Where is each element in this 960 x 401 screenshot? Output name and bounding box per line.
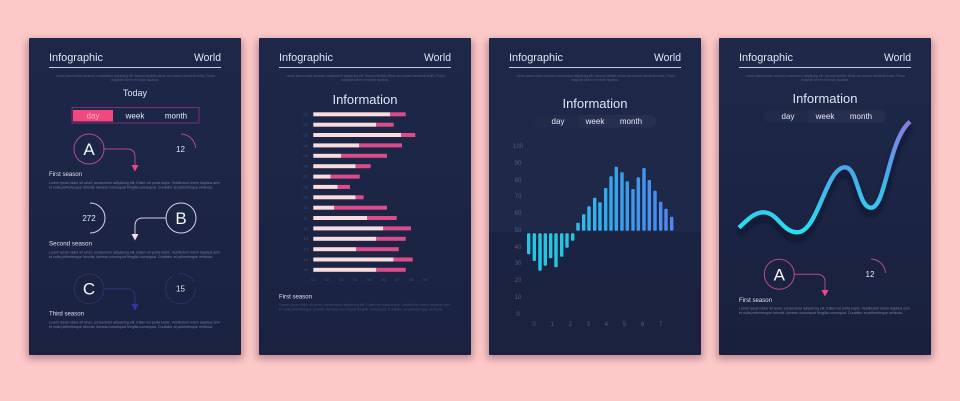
text: first season: Lorem ipsum dolor sit amet, consectetur adipiscing elit. Etiam vel porta turpis. Vestibulum lorem dapibus sem [279, 303, 450, 307]
bar chart: 06 [303, 164, 309, 169]
header: Lorem ipsum dolor sit amet, consectetur adipiscing elit. Aenean facilisis tellus non mauris hendrerit mollis. Fusce [286, 74, 445, 78]
tabs: day week month: week [125, 112, 145, 120]
tabs: day week month: day [782, 112, 794, 121]
heading: today: Today [123, 88, 148, 98]
tabs: day week month: month [165, 112, 187, 120]
tabs: day week month [764, 110, 886, 123]
bar chart: 03 [303, 132, 309, 137]
text: first season: First season [49, 171, 82, 178]
tabs: day week month: week [585, 117, 605, 126]
text: third season: Third season [49, 310, 84, 318]
bar chart: 10 [303, 205, 309, 210]
bar chart: 05 [303, 153, 309, 158]
text: first season: Lorem ipsum dolor sit amet, consectetur adipiscing elit. Etiam vel porta turpis. Vestibulum lorem dapibus sem [49, 181, 220, 185]
y axis labels: 80 [515, 178, 522, 184]
item: second season diagram: B [175, 209, 187, 228]
text: first season: First season [279, 294, 312, 300]
header: World [424, 52, 451, 64]
header [509, 52, 681, 82]
header: vulputate lorem vel rutrum faucibus. [801, 78, 849, 82]
x axis labels: 3 [587, 322, 591, 328]
tabs: day week month: day [87, 112, 99, 120]
item: first season diagram: A [774, 265, 786, 284]
text: first season [49, 171, 220, 190]
heading: information: Information [562, 96, 628, 111]
item: first season diagram: 12 [176, 145, 185, 154]
tabs: day week month: month [620, 117, 642, 126]
item: first season diagram: A [83, 140, 95, 159]
text: second season: et nulla pellentesque lobortis. Aenean consequat fringilla consequat. Curabitur at pellentesque vehicula. [49, 255, 213, 259]
header: Infographic [279, 52, 333, 64]
x axis labels: 4 [605, 322, 609, 328]
y axis labels: 0 [516, 312, 520, 318]
bar chart: 04 [303, 143, 309, 148]
x axis labels: 5 [623, 322, 627, 328]
text: first season [279, 294, 450, 312]
y axis labels: 60 [515, 211, 522, 217]
bar chart: 07 [303, 174, 309, 179]
bar chart: 16 [303, 267, 309, 272]
tabs: day week month: month [850, 112, 872, 121]
bar chart: 08 [409, 277, 414, 282]
bar chart: 02 [303, 122, 309, 127]
text: first season: et nulla pellentesque lobortis. Aenean consequat fringilla consequat. Curabitur at pellentesque vehicula. [279, 308, 443, 312]
heading: information: Information [792, 91, 858, 106]
header: World [884, 52, 911, 64]
y axis labels: 10 [515, 295, 522, 301]
y axis labels [513, 144, 524, 318]
bar chart: 08 [303, 184, 309, 189]
header [279, 52, 451, 82]
columns below the midline [527, 233, 574, 271]
header: vulputate lorem vel rutrum faucibus. [341, 78, 389, 82]
tabs: day week month: day [552, 117, 564, 126]
bar chart: 09 [303, 195, 309, 200]
item: second season diagram [82, 203, 196, 240]
panel: horizontal bars [257, 38, 473, 359]
item: first season diagram: 12 [866, 270, 875, 279]
item: third season diagram [74, 274, 196, 311]
x axis labels [532, 322, 663, 328]
text: third season: et nulla pellentesque lobortis. Aenean consequat fringilla consequat. Curabitur at pellentesque vehicula. [49, 325, 213, 329]
text: first season [739, 297, 910, 315]
header: Infographic [739, 52, 793, 64]
x axis labels: 1 [551, 322, 555, 328]
y axis labels: 20 [515, 278, 522, 284]
heading: information: Information [332, 92, 398, 107]
bar chart: 09 [423, 277, 428, 282]
line chart curve [739, 122, 910, 238]
tabs: day week month: week [815, 112, 835, 121]
tabs: day week month [72, 108, 199, 123]
header: Infographic [49, 52, 103, 64]
bar chart: 15 [303, 257, 309, 262]
bar chart: 06 [381, 277, 386, 282]
x axis labels: 0 [532, 322, 536, 328]
text: second season: Second season [49, 240, 92, 248]
x axis labels: 6 [641, 322, 645, 328]
text: second season [49, 240, 220, 259]
y axis labels: 40 [515, 245, 522, 251]
bar chart: 14 [303, 247, 309, 252]
header: vulputate lorem vel rutrum faucibus. [571, 78, 619, 82]
text: second season: Lorem ipsum dolor sit amet, consectetur adipiscing elit. Etiam vel porta turpis. Vestibulum lorem dapibus sem [49, 250, 220, 254]
text: first season: et nulla pellentesque lobortis. Aenean consequat fringilla consequat. Curabitur at pellentesque vehicula. [49, 186, 213, 190]
header: Infographic [509, 52, 563, 64]
header: Lorem ipsum dolor sit amet, consectetur adipiscing elit. Aenean facilisis tellus non mauris hendrerit mollis. Fusce [56, 74, 215, 78]
x axis labels: 7 [659, 322, 663, 328]
text: third season: Lorem ipsum dolor sit amet, consectetur adipiscing elit. Etiam vel porta turpis. Vestibulum lorem dapibus sem [49, 320, 220, 324]
bar chart [303, 112, 428, 282]
item: first season diagram [74, 134, 196, 172]
item: second season diagram: 272 [82, 214, 96, 223]
header: vulputate lorem vel rutrum faucibus. [111, 78, 159, 82]
bar chart: 11 [304, 215, 309, 220]
bar chart: 01 [303, 112, 309, 117]
bar chart: 01 [311, 277, 316, 282]
header: Lorem ipsum dolor sit amet, consectetur adipiscing elit. Aenean facilisis tellus non mauris hendrerit mollis. Fusce [746, 74, 905, 78]
y axis labels: 30 [515, 261, 522, 267]
item: third season diagram: 15 [176, 284, 185, 294]
text: first season: First season [739, 297, 772, 304]
y axis labels: 70 [515, 194, 522, 200]
bar chart: 13 [303, 236, 309, 241]
bar chart: 03 [339, 277, 344, 282]
text: first season: Lorem ipsum dolor sit amet, consectetur adipiscing elit. Etiam vel porta turpis. Vestibulum lorem dapibus sem [739, 306, 910, 310]
panel: curve chart [717, 38, 933, 359]
header: Lorem ipsum dolor sit amet, consectetur adipiscing elit. Aenean facilisis tellus non mauris hendrerit mollis. Fusce [516, 74, 675, 78]
item: first season diagram [764, 259, 886, 296]
item: third season diagram: C [83, 280, 95, 299]
y axis labels: 100 [513, 144, 524, 150]
header: World [194, 52, 221, 64]
bar chart: 04 [353, 277, 358, 282]
bar chart: 02 [325, 277, 330, 282]
bar chart: 05 [367, 277, 372, 282]
x axis labels: 2 [569, 322, 573, 328]
bar chart: 07 [395, 277, 400, 282]
header [49, 52, 221, 82]
header: World [654, 52, 681, 64]
panel: today seasons [27, 38, 243, 359]
panel: column chart [487, 38, 703, 359]
header [739, 52, 911, 82]
columns above the midline [576, 167, 673, 231]
y axis labels: 50 [515, 228, 522, 234]
y axis labels: 90 [515, 161, 522, 167]
bar chart: 12 [303, 226, 309, 231]
tabs: day week month [534, 115, 656, 128]
text: third season [49, 310, 220, 329]
text: first season: et nulla pellentesque lobortis. Aenean consequat fringilla consequat. Curabitur at pellentesque vehicula. [739, 311, 903, 315]
